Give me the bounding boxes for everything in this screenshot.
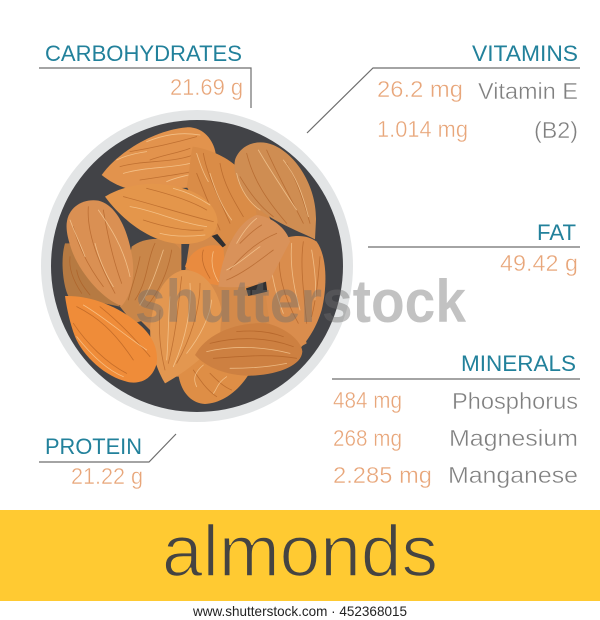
almond: back left — [63, 243, 120, 307]
plate rim — [41, 110, 353, 422]
protein block — [39, 434, 176, 489]
heading: vitamins: VITAMINS — [472, 41, 578, 66]
magnesium name: Magnesium — [449, 425, 578, 451]
almond: mid right — [218, 215, 290, 287]
vitamin E name: Vitamin E — [478, 78, 578, 104]
almond: lower left — [65, 296, 157, 383]
value: 21.69 g — [170, 74, 243, 100]
vitamin E value: 26.2 mg — [377, 76, 463, 102]
carbohydrates block — [39, 41, 251, 108]
value: 21.22 g — [71, 463, 143, 489]
almond: centre orange — [185, 245, 227, 287]
almond: left — [67, 200, 133, 306]
B2 name: (B2) — [534, 117, 578, 143]
almond: top right — [234, 142, 316, 239]
almond: centre lower — [150, 270, 222, 383]
almond pile underlay — [130, 153, 307, 377]
minerals block — [332, 351, 580, 488]
manganese name: Manganese — [448, 462, 578, 488]
plate centre — [51, 120, 343, 412]
leader line — [39, 68, 251, 108]
fat block — [368, 220, 580, 276]
divider line — [368, 246, 580, 248]
watermark: shutterstock — [135, 268, 467, 335]
leader line — [307, 68, 580, 133]
manganese value: 2.285 mg — [333, 462, 432, 488]
title band — [0, 510, 600, 601]
divider line — [332, 378, 580, 380]
value: 49.42 g — [500, 250, 578, 276]
almond: top left — [102, 127, 216, 190]
almond: lower right — [263, 236, 325, 348]
vitamins block — [307, 41, 580, 143]
almond: top middle — [187, 147, 257, 243]
dark gap between almonds — [246, 282, 267, 296]
almond: middle left — [120, 239, 181, 323]
band background — [0, 510, 600, 601]
plate of almonds — [41, 110, 353, 422]
almond: centre — [105, 184, 218, 244]
heading: minerals: MINERALS — [461, 351, 576, 376]
leader line — [39, 434, 176, 462]
dark gap between top almonds — [212, 234, 226, 247]
title: almonds — [162, 512, 438, 592]
dark gap at centre — [181, 244, 189, 270]
B2 value: 1.014 mg — [377, 116, 468, 142]
heading: fat: FAT — [537, 220, 576, 245]
almonds — [63, 127, 325, 404]
magnesium value: 268 mg — [333, 425, 402, 451]
phosphorus value: 484 mg — [333, 387, 402, 413]
dark gap left of centre — [127, 227, 143, 245]
almond: lower right horizontal — [195, 323, 302, 376]
heading: carbohydrates: CARBOHYDRATES — [45, 41, 242, 66]
stock url: www.shutterstock.com · 452368015 — [192, 603, 407, 619]
heading: protein: PROTEIN — [45, 434, 142, 459]
almond: bottom — [178, 358, 248, 404]
phosphorus name: Phosphorus — [452, 388, 578, 414]
